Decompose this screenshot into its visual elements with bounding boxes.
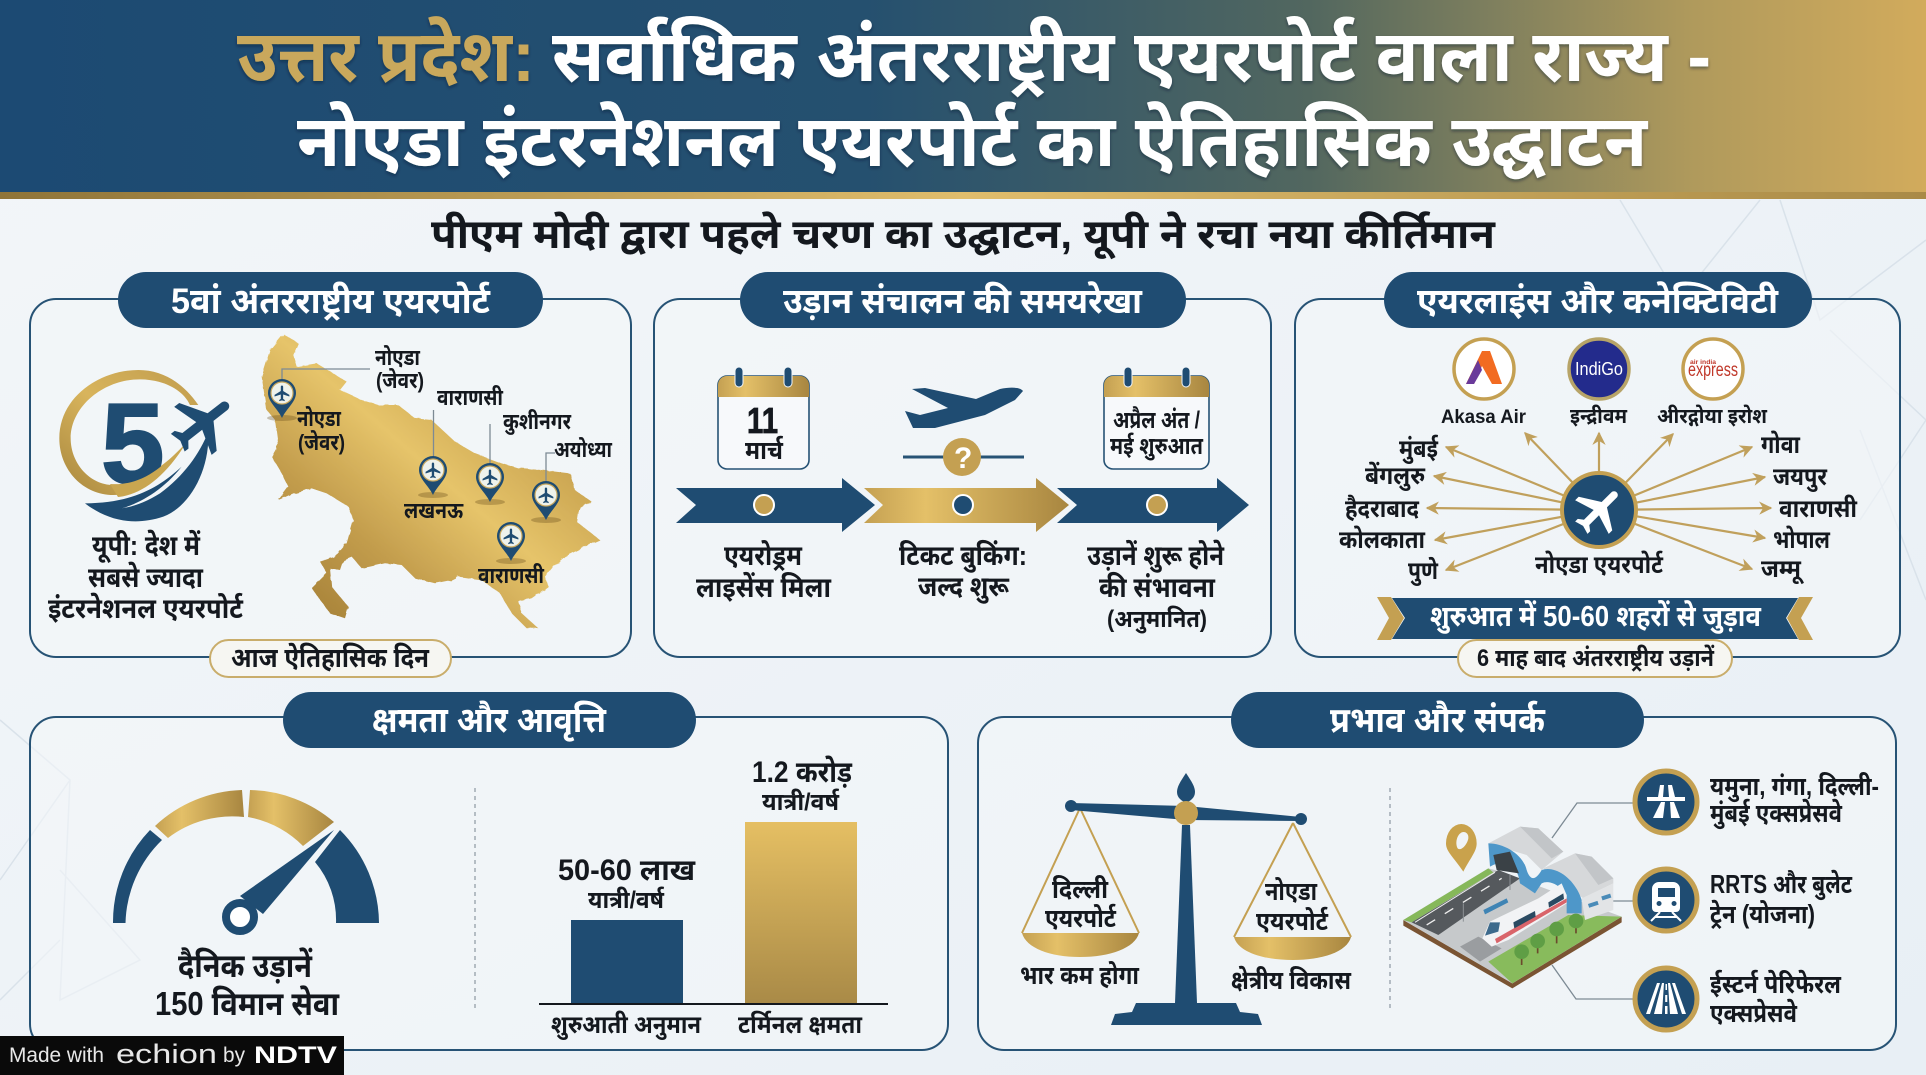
connection arrows	[1427, 433, 1771, 570]
text: RRTS and bullet train: RRTS और बुलेट	[1710, 869, 1853, 900]
milestone: aerodrome licence: एयरोड्रम	[724, 539, 803, 572]
map labels: नोएडा	[297, 406, 341, 431]
icon: road	[1635, 968, 1697, 1030]
icon: number 5 logo with plane: 5	[101, 381, 164, 508]
icon: calendar late April: मई शुरुआत	[1110, 432, 1204, 461]
icon: balance scale: नोएडा	[1265, 876, 1318, 906]
map labels: (जेवर)	[298, 430, 345, 455]
gauge caption: 150 विमान सेवा	[155, 984, 340, 1022]
milestone: aerodrome licence: लाइसेंस मिला	[696, 571, 832, 603]
text: Yamuna Ganga expressway: मुंबई एक्सप्रेसवे	[1710, 798, 1843, 829]
icon: balance scale: एयरपोर्ट	[1045, 903, 1117, 933]
panel: impact and connectivity	[978, 692, 1896, 1050]
panel: flight operations timeline	[654, 272, 1271, 657]
icon: calendar 11 March: 11	[747, 400, 778, 441]
location pin	[1446, 824, 1477, 872]
map labels	[297, 345, 612, 588]
title: उत्तर प्रदेश:	[237, 16, 535, 97]
connector lines	[1552, 803, 1635, 999]
heading pill: उड़ान संचालन की समयरेखा	[783, 281, 1143, 321]
logo: IndiGo: इन्द्रीवम	[1570, 404, 1627, 428]
text: Eastern Peripheral expressway: ईस्टर्न पेरिफेरल	[1710, 969, 1842, 999]
heading pill	[1384, 272, 1812, 328]
panel: airlines and connectivity	[1295, 272, 1900, 677]
icon: plane taking off	[905, 388, 1023, 428]
map of Uttar Pradesh	[262, 334, 600, 628]
gauge caption	[155, 946, 340, 1022]
heading pill: 5वां अंतरराष्ट्रीय एयरपोर्ट	[171, 281, 491, 322]
panel: 5th international airport	[30, 272, 631, 677]
city labels: वाराणसी	[1779, 494, 1858, 523]
logo: IndiGo	[1569, 339, 1629, 428]
panel: capacity and frequency	[30, 692, 948, 1050]
text: Yamuna Ganga expressway	[1710, 771, 1879, 829]
icon: calendar 11 March	[718, 367, 809, 469]
city labels: मुंबई	[1399, 434, 1439, 464]
city labels: गोवा	[1761, 430, 1801, 459]
text: Eastern Peripheral expressway	[1710, 969, 1842, 1028]
text: RRTS and bullet train: ट्रेन (योजना)	[1710, 899, 1815, 929]
gauge caption: दैनिक उड़ानें	[178, 946, 313, 984]
icon: calendar late April	[1104, 367, 1209, 469]
city labels: भोपाल	[1773, 525, 1830, 554]
milestone: ticket booking	[899, 539, 1027, 604]
logo: Akasa Air	[1441, 339, 1527, 428]
header banner	[0, 0, 1926, 199]
bar chart: शुरुआती अनुमान	[551, 1010, 702, 1040]
city labels: जम्मू	[1761, 555, 1805, 585]
subtitle: पीएम मोदी द्वारा पहले चरण का उद्घाटन, यूपी ने रचा नया कीर्तिमान	[431, 210, 1496, 260]
text: RRTS and bullet train	[1710, 869, 1853, 929]
ribbon: 50-60 cities: शुरुआत में 50-60 शहरों से जुड़ाव	[1430, 599, 1761, 634]
watermark badge	[0, 1036, 344, 1075]
map labels: अयोध्या	[554, 437, 612, 462]
timeline arrows	[676, 478, 1249, 532]
bar chart: यात्री/वर्ष	[588, 886, 665, 914]
heading pill: एयरलाइंस और कनेक्टिविटी	[1417, 281, 1779, 321]
map labels: वाराणसी	[478, 563, 544, 588]
watermark badge: by	[223, 1044, 245, 1067]
icon: calendar 11 March: मार्च	[745, 435, 784, 465]
bar chart: 1.2 करोड़	[752, 755, 853, 789]
map leader lines	[282, 369, 555, 483]
chip: historic day: आज ऐतिहासिक दिन	[231, 642, 430, 673]
chip: international flights after 6 months: 6 माह बाद अंतरराष्ट्रीय उड़ानें	[1477, 644, 1715, 672]
caption: most international airports: इंटरनेशनल एयरपोर्ट	[48, 591, 244, 624]
milestone: ticket booking: टिकट बुकिंग:	[899, 539, 1027, 573]
map labels: कुशीनगर	[503, 409, 572, 435]
logo: Air India Express: air india	[1690, 360, 1717, 366]
logo: Akasa Air: Akasa Air	[1441, 407, 1527, 428]
map labels: (जेवर)	[376, 368, 424, 393]
icon: balance scale	[1020, 773, 1352, 1025]
icon: balance scale: भार कम होगा	[1020, 960, 1140, 990]
icon: train	[1635, 869, 1697, 931]
title	[237, 16, 1711, 182]
city labels: बेंगलुरु	[1365, 461, 1426, 491]
ribbon: 50-60 cities	[1377, 597, 1813, 640]
chip: international flights after 6 months	[1458, 640, 1732, 677]
bar chart: टर्मिनल क्षमता	[738, 1010, 863, 1039]
title: नोएडा इंटरनेशनल एयरपोर्ट का ऐतिहासिक उद्घाटन	[297, 101, 1649, 182]
milestone: flights start	[1087, 538, 1225, 634]
watermark badge: Made with	[9, 1044, 104, 1067]
city labels: पुणे	[1408, 556, 1439, 586]
icon: expressway overpass	[1635, 771, 1697, 833]
train	[1482, 883, 1567, 947]
milestone: flights start: (अनुमानित)	[1107, 605, 1207, 634]
logo: Air India Express: express	[1688, 360, 1738, 381]
heading pill	[283, 692, 696, 748]
logo: Air India Express	[1657, 339, 1768, 428]
icon: question mark on line: ?	[954, 442, 972, 475]
milestone: flights start: की संभावना	[1099, 571, 1216, 603]
caption: most international airports: यूपी: देश में	[92, 528, 201, 563]
trees	[1522, 922, 1576, 965]
heading pill: प्रभाव और संपर्क	[1330, 700, 1546, 740]
caption: most international airports	[48, 528, 244, 624]
icon: balance scale: एयरपोर्ट	[1256, 906, 1329, 936]
illustration: isometric station	[1403, 824, 1622, 988]
heading pill	[118, 272, 543, 328]
bar chart	[539, 755, 888, 1040]
heading pill	[740, 272, 1186, 328]
icon: balance scale: क्षेत्रीय विकास	[1231, 965, 1352, 995]
icon: balance scale: दिल्ली	[1052, 874, 1109, 904]
watermark badge: NDTV	[254, 1042, 337, 1069]
hub: Noida airport: नोएडा एयरपोर्ट	[1535, 550, 1663, 579]
icon: calendar late April: अप्रैल अंत /	[1113, 406, 1200, 434]
roofs	[1488, 827, 1563, 870]
bar chart: यात्री/वर्ष	[762, 788, 840, 816]
bar chart: 50-60 लाख	[558, 854, 696, 887]
title: सर्वाधिक अंतरराष्ट्रीय एयरपोर्ट वाला राज्य -	[552, 16, 1711, 97]
heading pill: क्षमता और आवृत्ति	[372, 700, 607, 742]
milestone: flights start: उड़ानें शुरू होने	[1087, 538, 1225, 573]
city labels: कोलकाता	[1339, 525, 1426, 554]
map labels: वाराणसी	[437, 385, 503, 410]
city labels: हैदराबाद	[1345, 494, 1420, 523]
watermark badge: echion	[116, 1039, 217, 1069]
logo: Air India Express: अीरद्गोया इरोश	[1657, 404, 1768, 428]
hub: Noida airport	[1535, 473, 1663, 579]
map labels: लखनऊ	[404, 498, 464, 523]
map labels: नोएडा	[375, 345, 420, 370]
gauge	[113, 790, 379, 931]
text: Eastern Peripheral expressway: एक्सप्रेसवे	[1710, 998, 1798, 1028]
milestone: ticket booking: जल्द शुरू	[918, 571, 1009, 604]
icon: question mark on line	[903, 438, 1024, 476]
map pins	[267, 379, 561, 564]
icon: number 5 logo with plane	[59, 370, 247, 521]
caption: most international airports: सबसे ज्यादा	[88, 560, 204, 593]
city labels: जयपुर	[1773, 463, 1828, 492]
city labels	[1339, 430, 1858, 586]
logo: IndiGo: IndiGo	[1575, 359, 1623, 379]
text: Yamuna Ganga expressway: यमुना, गंगा, दिल्ली-	[1710, 771, 1879, 802]
heading pill	[1231, 692, 1644, 748]
milestone: aerodrome licence	[696, 539, 832, 603]
